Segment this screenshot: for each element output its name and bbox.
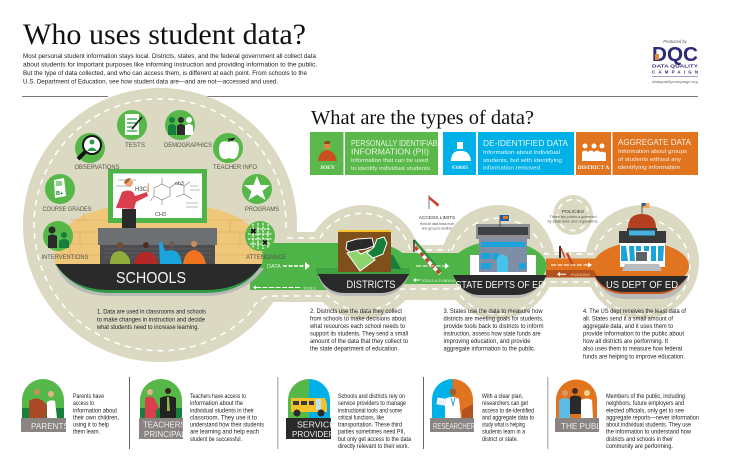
- icon: programs: [242, 174, 272, 204]
- logo: Data Quality Campaign: [652, 39, 699, 84]
- panel: teachers and principals: PRINCIPALS: [144, 429, 191, 439]
- arrow: data to state: [416, 263, 449, 269]
- icon: attendance: ✖: [262, 239, 268, 247]
- intro paragraph: But the type of data collected, and who can access them, is different at each point. From schools to the: [23, 70, 307, 77]
- text: the public: elected officials, only get to see: [606, 407, 684, 414]
- panel: service providers: SERVICE: [297, 420, 335, 430]
- text: the public: Members of the public, including: [606, 393, 685, 400]
- panel: schools: [55, 169, 264, 296]
- caption: schools: what students need to increase learning.: [96, 324, 199, 331]
- label: tests: TESTS: [125, 142, 145, 149]
- panel: researchers: RESEARCHERS: [433, 421, 479, 431]
- caption: state departments: 3. States use the data to measure how: [444, 308, 543, 315]
- text: the public: neighbors, future employers and: [606, 400, 684, 407]
- text: the public: community are performing.: [606, 443, 673, 450]
- caption: districts: what resources each school needs to: [309, 323, 405, 330]
- panel: state departments of education: [452, 215, 547, 298]
- label: programs: PROGRAMS: [245, 206, 279, 213]
- text: teachers: Teachers have access to: [190, 393, 246, 400]
- callout: access limits: [419, 195, 455, 230]
- intro paragraph: [23, 53, 317, 86]
- caption: US department: provide information to the public about: [583, 330, 684, 338]
- callout: policies: by state laws and regulations.: [548, 220, 599, 224]
- icon: course grades: [45, 174, 75, 204]
- panel: aggregate data: Information about groups: [618, 149, 687, 155]
- whiteboard: [108, 169, 207, 223]
- caption: state departments: districts are meeting goals for students,: [444, 316, 544, 322]
- text: researchers: researchers can get: [482, 400, 528, 407]
- text: teachers: individual students in their: [190, 407, 255, 414]
- bench: [98, 228, 217, 264]
- icon: public: [556, 379, 597, 418]
- intro paragraph: U.S. Department of Education, see how student data are—and are not—accessed and used.: [23, 78, 278, 86]
- text: parents: them learn.: [73, 429, 100, 436]
- text: teachers: [190, 393, 264, 443]
- text: service providers: critical functions, like: [338, 414, 384, 422]
- text: service providers: Schools and districts rely on: [338, 393, 405, 400]
- gate: access limits barrier: [414, 240, 441, 274]
- icon: observations: [75, 133, 105, 163]
- icon: attendance: ✖: [250, 227, 257, 236]
- panel: teachers and principals: TEACHERS &: [143, 420, 193, 430]
- label: attendance: ATTENDANCE: [246, 254, 286, 261]
- caption: schools: 1. Data are used in classrooms and schools: [97, 309, 206, 316]
- caption: districts: [309, 308, 408, 353]
- label: course grades: COURSE GRADES: [42, 206, 92, 213]
- label: demographics: DEMOGRAPHICS: [164, 142, 212, 149]
- caption: US department: how all districts are performing. It: [583, 338, 668, 345]
- teacher figure: [116, 178, 149, 228]
- label: us dept of ed: US DEPT OF ED: [606, 279, 678, 291]
- text: the public: [606, 393, 699, 450]
- panel: researchers: [430, 379, 534, 443]
- text: teachers: understand how their students: [190, 422, 264, 429]
- icon: school bus: [288, 379, 330, 418]
- students: [110, 241, 206, 264]
- wood floor: [55, 207, 263, 264]
- text: parents: using it to help: [73, 422, 109, 429]
- panel: de-identified data: information removed: [483, 166, 540, 172]
- gate: policies barrier: [560, 246, 573, 266]
- arrow: data to federal: [551, 262, 592, 268]
- panel: de-identified data: students, but with identifying: [483, 158, 562, 164]
- label: districts: DISTRICTS: [346, 279, 396, 291]
- panel: aggregate data: of students without any: [618, 157, 681, 163]
- icon: tests: [117, 110, 147, 140]
- text: researchers: and aggregate data to: [482, 414, 534, 422]
- icon: attendance: [245, 221, 275, 251]
- icon: capitol building: [619, 203, 666, 271]
- caption: state departments: improving education, and provide: [444, 338, 531, 345]
- text: researchers: [482, 393, 534, 443]
- callout: access limits: one group to another: [422, 226, 453, 230]
- text: researchers: students learn in a: [482, 429, 525, 436]
- panel: districts: [316, 230, 410, 296]
- text: researchers: With a clear plan,: [482, 393, 523, 400]
- text: parents: access to: [73, 400, 94, 407]
- text: parents: [73, 393, 119, 436]
- icon: parents: [22, 379, 64, 418]
- text: researchers: access to de-identified: [482, 407, 534, 414]
- panel: aggregate data: identifying information: [618, 165, 680, 171]
- panel: aggregate data: AGGREGATE DATA: [618, 138, 692, 147]
- caption: state departments: provide tools back to districts to inform: [444, 323, 544, 330]
- icon: researcher: [432, 379, 473, 418]
- icon: anonymous student: #30605: [452, 165, 468, 171]
- logo: Data Quality Campaign: DATA QUALITY: [652, 64, 699, 70]
- text: teachers: are learning and help each: [190, 429, 259, 436]
- arrow: data to districts: [267, 262, 310, 270]
- text: the public: aggregate reports—never information: [606, 414, 699, 422]
- text: the public: the information to understand how: [606, 429, 691, 436]
- panel: de-identified data: Information about individual: [483, 150, 560, 156]
- arrow: tools back to schools: TOOLS: [303, 286, 316, 290]
- label: interventions: INTERVENTIONS: [42, 254, 88, 261]
- text: service providers: directly relevant to their work.: [338, 443, 409, 450]
- caption: districts: amount of the data that they collect to: [310, 338, 408, 345]
- icon: district map: [338, 230, 401, 272]
- heading: types of data: What are the types of data?: [311, 107, 534, 129]
- caption: US department: aggregate data, and it uses them to: [583, 323, 673, 330]
- whiteboard: H3C: [135, 187, 148, 193]
- text: teachers: student be successful.: [190, 436, 242, 443]
- caption: state departments: instruction, assess how state funds are: [444, 330, 541, 338]
- text: service providers: [338, 393, 411, 450]
- callout: policies: These two points a governed: [550, 215, 597, 219]
- text: parents: Parents have: [73, 393, 104, 400]
- text: service providers: transportation. These third: [338, 422, 402, 429]
- arrow: tools back to schools: [253, 286, 316, 290]
- panel: teachers and principals: [139, 379, 264, 443]
- logo: Data Quality Campaign: DQC: [652, 44, 698, 66]
- panel: parents: [21, 379, 119, 436]
- panel: service providers: [286, 379, 411, 450]
- text: service providers: service providers to manage: [338, 400, 406, 407]
- panel: personally identifiable information: INFORMATION (PII): [351, 148, 429, 156]
- text: parents: information about: [73, 407, 117, 414]
- panel: service providers: PROVIDERS: [292, 429, 340, 439]
- panel: US department of education: [593, 203, 689, 299]
- icon: interventions: [43, 221, 73, 251]
- school band: [57, 268, 264, 296]
- panel: the public: THE PUBLIC: [561, 421, 609, 431]
- whiteboard: ch3: [175, 181, 184, 187]
- caption: US department: also uses them to measure how federal: [583, 346, 682, 353]
- text: the public: districts and schools in their: [606, 436, 674, 443]
- panel: personally identifiable information: [310, 132, 446, 175]
- whiteboard: CH3: [155, 212, 166, 218]
- panel: personally identifiable information: PERSONALLY IDENTIFIABLE: [351, 139, 446, 148]
- caption: US department: all. States send it a small amount of: [583, 316, 673, 322]
- panel: de-identified data: [443, 132, 574, 175]
- arrow: funding: FUNDING: [571, 272, 590, 277]
- callout: policies: POLICIES: [562, 209, 584, 215]
- callout: policies: [548, 209, 599, 224]
- label: state depts of ed: STATE DEPTS OF ED: [456, 279, 545, 291]
- label: observations: OBSERVATIONS: [74, 164, 120, 171]
- arrow: tools and funding: TOOLS & FUNDING: [421, 278, 456, 283]
- caption: schools: to make changes in instruction and decide: [97, 316, 205, 324]
- callout: access limits: ACCESS LIMITS: [419, 215, 455, 221]
- caption: schools: [96, 309, 206, 331]
- text: service providers: but only get access to the data: [338, 436, 411, 443]
- logo: Data Quality Campaign: dataqualitycampaign.org: [652, 80, 698, 84]
- text: teachers: information about the: [190, 400, 243, 407]
- icon: district group: DISTRICT A: [578, 165, 609, 171]
- icon: teacher info: [213, 133, 243, 163]
- text: researchers: study what is helping: [482, 422, 525, 429]
- panel: aggregate data: [576, 132, 698, 175]
- icon: demographics: [165, 110, 195, 140]
- logo: Data Quality Campaign: Produced by: [663, 39, 688, 44]
- intro paragraph: Most personal student information stays local. Districts, states, and the federal government all collect data: [23, 53, 316, 60]
- panel: parents: PARENTS: [31, 421, 69, 431]
- orange funding band: [546, 258, 598, 278]
- icon: state building: [476, 215, 530, 272]
- icon: Joey student: JOEY: [320, 165, 335, 171]
- caption: state departments: aggregate information to the public.: [444, 346, 536, 353]
- caption: districts: 2. Districts use the data they collect: [310, 308, 402, 315]
- caption: districts: the state department of education.: [310, 346, 399, 353]
- arrow: funding: [557, 272, 590, 277]
- panel: personally identifiable information: Information that can be used: [351, 158, 428, 164]
- text: service providers: parties sometimes need PII,: [338, 429, 405, 436]
- callout: access limits: Hold all data flows from: [420, 222, 454, 226]
- label: teacher info: TEACHER INFO: [213, 164, 257, 171]
- text: parents: their own children,: [73, 414, 119, 422]
- caption: state departments: [444, 308, 544, 353]
- text: teachers: classroom. They use it to: [190, 414, 257, 422]
- panel: de-identified data: DE-IDENTIFIED DATA: [483, 139, 569, 148]
- text: researchers: district or state.: [482, 436, 518, 443]
- caption: US department: [583, 308, 686, 360]
- caption: districts: from schools to make decisions about: [310, 316, 406, 322]
- text: the public: about individual students. They use: [606, 422, 691, 429]
- caption: US department: funds are helping to improve education.: [583, 354, 685, 360]
- caption: districts: support its students. They send a small: [310, 330, 408, 338]
- panel: personally identifiable information: to identify individual students: [351, 166, 430, 172]
- caption: US department: 4. The US dept receives the least data of: [583, 308, 686, 315]
- green data band: [250, 243, 465, 290]
- icon: course grades: B+: [56, 191, 63, 197]
- label: schools: SCHOOLS: [116, 270, 186, 287]
- intro paragraph: about students for important purposes like informing instruction and providing information to the public.: [23, 62, 317, 68]
- icon: teachers: [140, 379, 182, 418]
- title: Who uses student data?: [23, 18, 306, 51]
- logo: Data Quality Campaign: CAMPAIGN: [652, 70, 698, 74]
- panel: the public: [555, 379, 699, 450]
- road background: [23, 88, 699, 362]
- text: service providers: instructional tools and some: [338, 407, 402, 414]
- arrow: data to districts: DATA: [267, 264, 281, 270]
